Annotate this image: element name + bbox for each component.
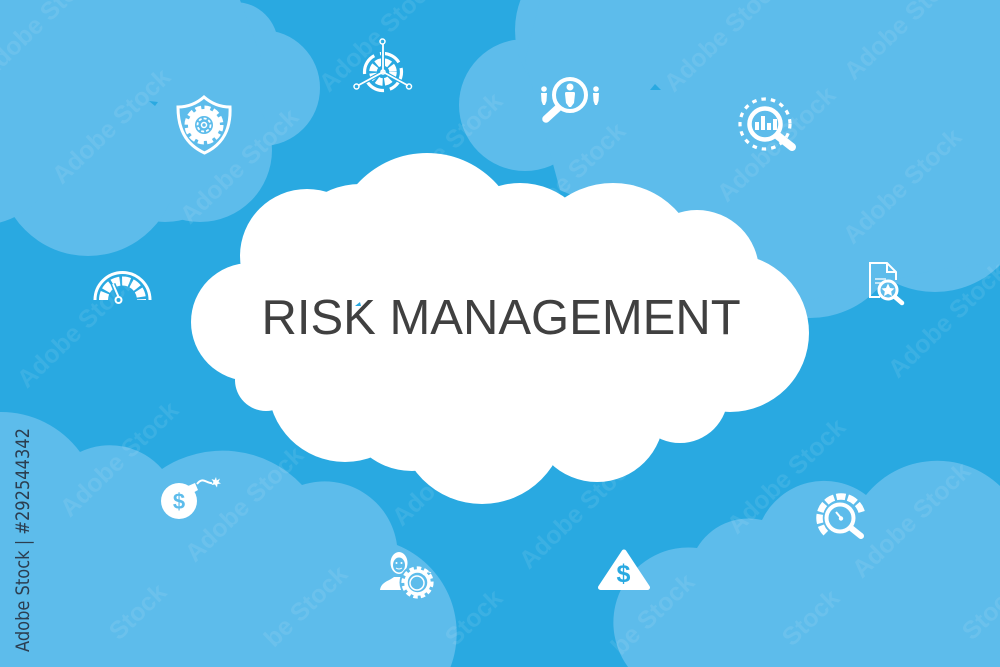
panel: top-left cloud [0, 0, 320, 256]
watermark pattern: Adobe Stock [502, 117, 631, 243]
icon: document with star magnifier [870, 263, 902, 303]
watermark pattern: Stock [104, 578, 172, 646]
icon: process network with gear [354, 39, 412, 90]
stock credit text: Adobe Stock | #292544342 [12, 428, 34, 652]
icon: person with gear bomb [380, 552, 436, 600]
icon: dollar bomb [161, 477, 221, 519]
panel: top-right cloud [459, 0, 1000, 318]
icon: dollar bomb: $ [173, 489, 185, 514]
icon: magnifier with dial [820, 497, 862, 536]
icon: speedometer gauge [95, 272, 150, 303]
watermark pattern: be Stock [606, 568, 700, 661]
watermark pattern: Adobe Stock [379, 87, 508, 213]
panel: central white cloud [191, 153, 809, 504]
watermark pattern: Adobe Stock [514, 448, 643, 574]
watermark pattern: Adobe Stock [722, 413, 851, 539]
title: RISK MANAGEMENT [262, 291, 741, 345]
watermark pattern: Adobe Stock [387, 405, 516, 531]
watermark pattern: Adobe Stock [47, 63, 176, 189]
watermark pattern: Stock [440, 584, 508, 652]
watermark pattern: Adobe Stock [712, 81, 841, 207]
watermark pattern: Adobe Stock [847, 457, 976, 583]
icon: magnifier over people [541, 79, 599, 119]
small triangle marks [149, 84, 661, 306]
panel: bottom-left cloud [0, 412, 457, 667]
icon: dollar warning triangle: $ [617, 560, 631, 588]
watermark pattern: Adobe Stock [180, 441, 309, 567]
watermark pattern: Adobe Stock [12, 267, 141, 393]
watermark pattern: be Stock [259, 560, 353, 653]
watermark pattern: Adobe Stock [838, 123, 967, 249]
icon: shield with gear [178, 97, 230, 153]
watermark pattern: Stock [777, 584, 845, 652]
watermark pattern: Adobe Stock [55, 396, 184, 522]
icon: magnifier with bar chart [740, 99, 792, 149]
panel: bottom-right cloud [613, 461, 1000, 667]
watermark pattern: Adobe Stock [175, 103, 304, 229]
icon: dollar warning triangle [600, 552, 648, 588]
